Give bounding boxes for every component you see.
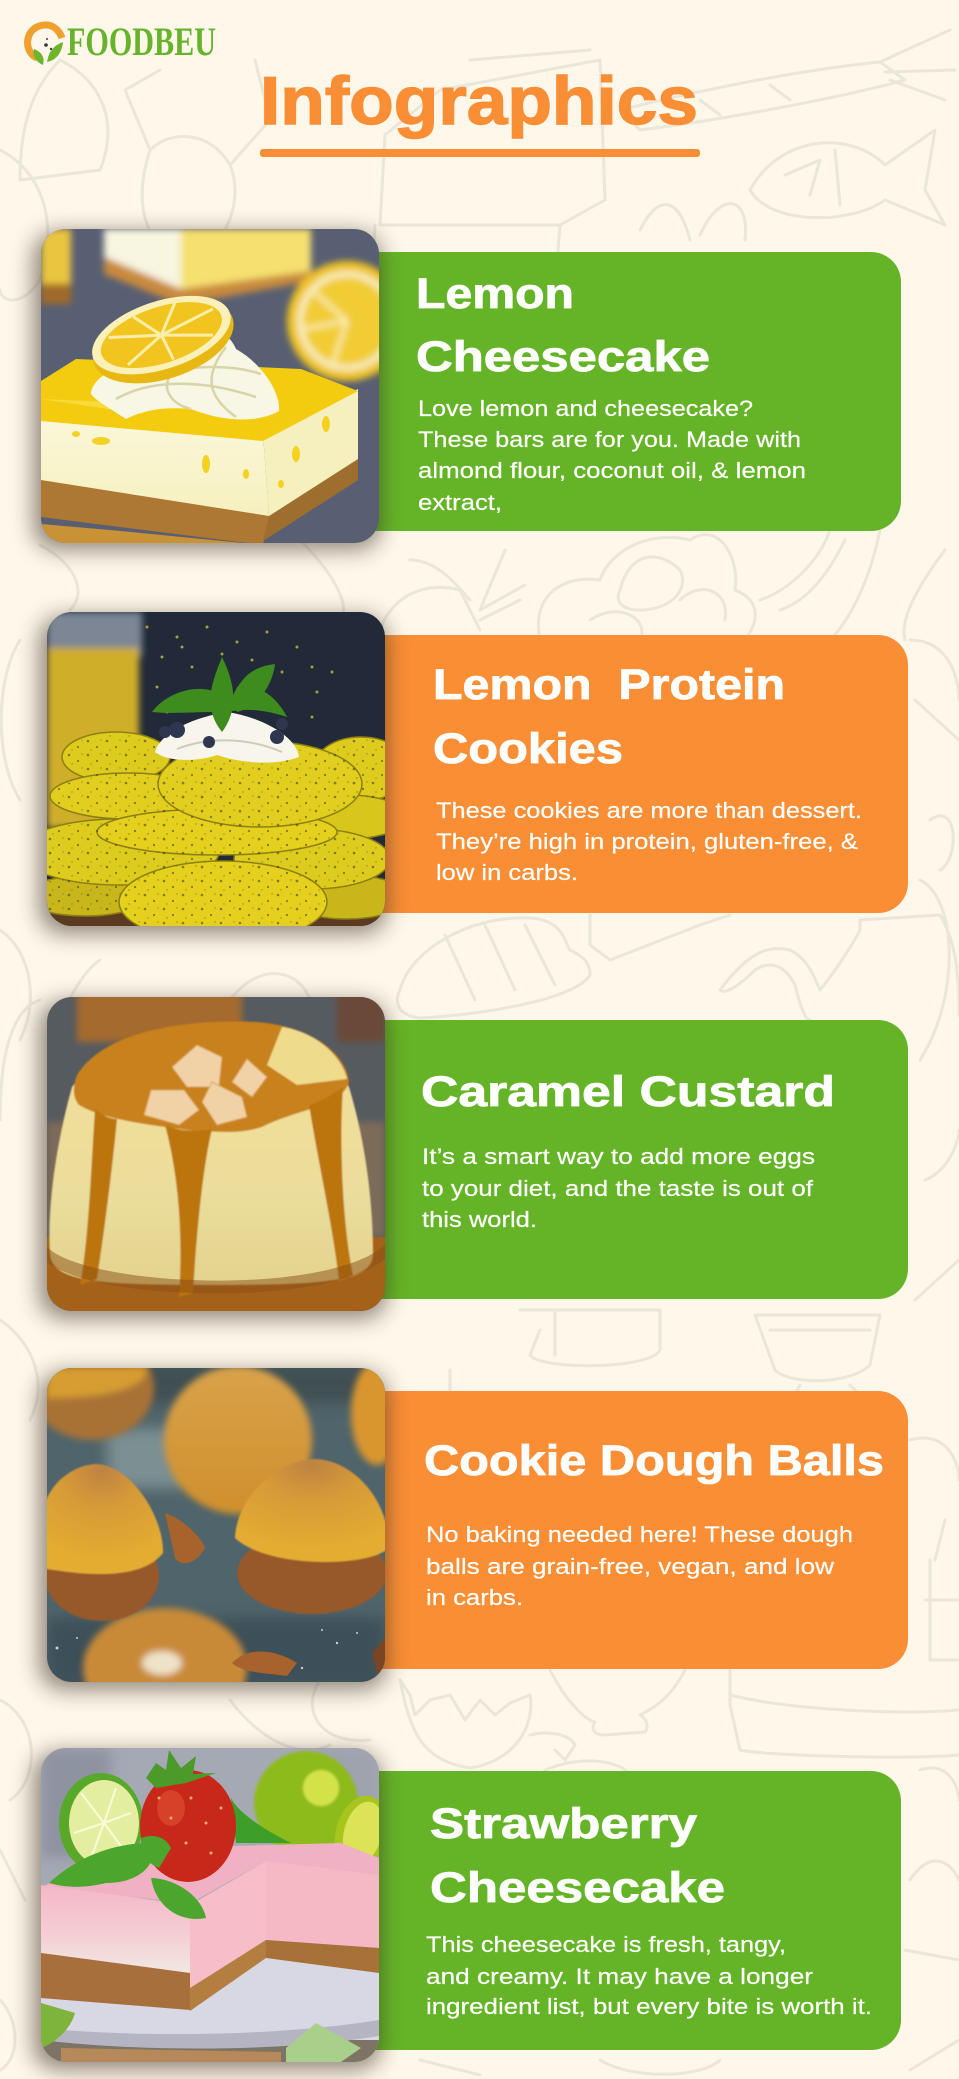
card background bbox=[360, 1771, 901, 2050]
heading: Cookies bbox=[433, 725, 623, 773]
description: ingredient list, but every bite is worth it. bbox=[426, 1994, 872, 2019]
panel: lemon cheesecake bbox=[33, 229, 901, 550]
heading bbox=[430, 1800, 725, 1912]
photo shadow bbox=[39, 1001, 387, 1319]
description: to your diet, and the taste is out of bbox=[422, 1176, 814, 1201]
description: low in carbs. bbox=[436, 860, 578, 885]
description bbox=[422, 1144, 815, 1232]
card background bbox=[366, 1391, 908, 1669]
title underline bbox=[260, 149, 700, 157]
whipped cream bbox=[91, 330, 279, 419]
photo: cookie dough balls bbox=[47, 1368, 385, 1682]
panel: caramel custard bbox=[39, 992, 908, 1319]
description bbox=[426, 1522, 853, 1610]
panel: strawberry cheesecake bbox=[33, 1748, 901, 2070]
description: This cheesecake is fresh, tangy, bbox=[426, 1932, 786, 1957]
heading: Cookie Dough Balls bbox=[424, 1437, 884, 1485]
icon: orange ring with leaves bbox=[28, 25, 63, 65]
description: They’re high in protein, gluten-free, & bbox=[436, 829, 858, 854]
heading: Lemon bbox=[416, 270, 574, 318]
panel: lemon protein cookies bbox=[19, 612, 908, 943]
description: and creamy. It may have a longer bbox=[426, 1964, 814, 1989]
description: this world. bbox=[422, 1207, 537, 1232]
brand name: FOODBEU bbox=[67, 19, 216, 64]
logo: Foodbeu bbox=[28, 19, 216, 65]
description: It’s a smart way to add more eggs bbox=[422, 1144, 815, 1169]
heading: Cheesecake bbox=[416, 333, 710, 381]
card background bbox=[366, 1020, 908, 1299]
description bbox=[436, 798, 862, 885]
heading bbox=[416, 270, 710, 381]
description: No baking needed here! These dough bbox=[426, 1522, 853, 1547]
description bbox=[426, 1932, 872, 2019]
photo: lemon poppy seed cookies bbox=[47, 612, 385, 926]
heading: Lemon Protein bbox=[433, 661, 785, 709]
description: These bars are for you. Made with bbox=[418, 427, 801, 452]
heading: Cheesecake bbox=[430, 1864, 725, 1912]
heading bbox=[433, 661, 785, 773]
card background bbox=[366, 635, 908, 913]
description bbox=[418, 396, 806, 515]
title: Infographics bbox=[260, 63, 698, 139]
card background bbox=[360, 252, 901, 531]
photo shadow bbox=[39, 616, 387, 934]
description: in carbs. bbox=[426, 1585, 523, 1610]
panel: cookie dough balls bbox=[23, 1356, 908, 1706]
photo: lemon cheesecake bar bbox=[41, 229, 407, 549]
heading: Caramel Custard bbox=[421, 1068, 835, 1116]
photo shadow bbox=[33, 232, 381, 550]
description: almond flour, coconut oil, & lemon bbox=[418, 458, 806, 483]
description: These cookies are more than dessert. bbox=[436, 798, 862, 823]
photo: strawberry cheesecake bbox=[41, 1748, 395, 2062]
description: extract, bbox=[418, 490, 502, 515]
photo shadow bbox=[39, 1372, 387, 1690]
description: Love lemon and cheesecake? bbox=[418, 396, 753, 421]
description: balls are grain-free, vegan, and low bbox=[426, 1554, 835, 1579]
photo: caramel custard bbox=[47, 992, 385, 1311]
photo shadow bbox=[33, 1752, 381, 2070]
heading: Strawberry bbox=[430, 1800, 697, 1848]
